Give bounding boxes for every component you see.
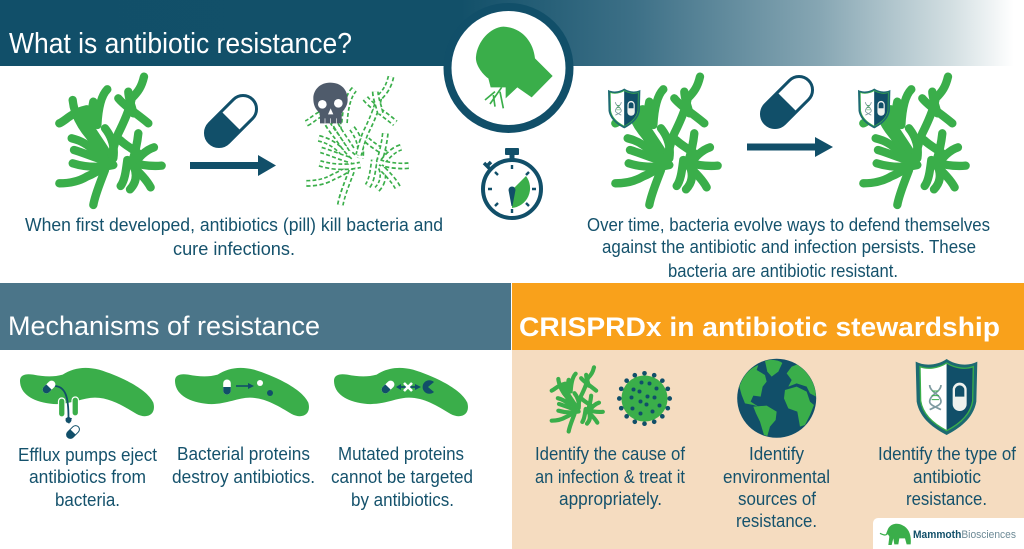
text: identify environmental: Identify [749, 444, 804, 464]
icon: pill left [200, 90, 262, 152]
heading: CRISPRDx: CRISPRDx in antibiotic stewardship [519, 312, 1000, 342]
text: identify environmental [723, 444, 830, 531]
logo: Mammoth Biosciences: MammothBiosciences [913, 529, 1016, 541]
text: proteins destroy: destroy antibiotics. [172, 467, 315, 487]
text: identify cause [535, 444, 686, 509]
header band: what is antibiotic resistance [0, 0, 1024, 66]
text: proteins destroy: Bacterial proteins [177, 444, 310, 464]
text: first developed: cure infections. [173, 239, 295, 259]
panel header: mechanisms [0, 283, 511, 350]
icon: shield large [916, 359, 977, 435]
panel: CRISPRDx body [512, 350, 1024, 549]
icon: pill right [756, 71, 818, 133]
text: first developed: When first developed, antibiotics (pill) kill bacteria and [25, 215, 443, 235]
arrow left [190, 155, 276, 176]
icon: killed bacteria [306, 77, 409, 205]
text: identify cause: Identify the cause of [535, 444, 686, 464]
panel header: CRISPRDx [512, 283, 1024, 350]
text: efflux: antibiotics from [29, 467, 146, 487]
text: identify environmental: environmental [723, 467, 830, 487]
icon: protein destroying bacterium [175, 368, 309, 416]
icon: efflux bacterium [20, 368, 154, 440]
icon: stopwatch [483, 148, 541, 218]
title: What is antibiotic resistance? [9, 28, 352, 60]
text: mutated: by antibiotics. [351, 490, 454, 510]
icon: skull [313, 83, 348, 123]
text: efflux: bacteria. [55, 490, 120, 510]
icon: bacteria cluster left [59, 77, 162, 205]
text: identify cause: appropriately. [559, 489, 662, 509]
text: mutated [331, 444, 473, 510]
icon: bacteria cluster with shield B [858, 77, 966, 205]
text: proteins destroy [172, 444, 315, 487]
text: identify cause: an infection & treat it [535, 467, 685, 487]
text: over time: against the antibiotic and infection persists. These [602, 237, 976, 257]
icon: small bacteria [552, 367, 603, 431]
text: identify type: Identify the type of [878, 444, 1017, 464]
icon: circled head coughing [448, 7, 570, 129]
text: identify type: antibiotic [913, 467, 981, 487]
arrow right [747, 137, 833, 157]
text: mutated: cannot be targeted [331, 467, 473, 487]
text: over time: Over time, bacteria evolve ways to defend themselves [587, 215, 990, 235]
text: first developed [25, 215, 443, 259]
text: efflux [18, 445, 157, 510]
icon: globe [737, 359, 816, 438]
icon: virus [617, 371, 672, 426]
text: mutated: Mutated proteins [338, 444, 464, 464]
text: identify type: resistance. [906, 489, 987, 509]
text: over time: bacteria are antibiotic resistant. [668, 261, 898, 281]
text: identify type [878, 444, 1017, 509]
icon: mutated protein bacterium [334, 368, 468, 416]
logo: Mammoth Biosciences [873, 518, 1024, 549]
text: identify environmental: sources of [738, 489, 817, 509]
text: efflux: Efflux pumps eject [18, 445, 157, 465]
icon: bacteria cluster with shield A [608, 77, 718, 205]
heading: mechanisms: Mechanisms of resistance [8, 311, 320, 341]
text: identify environmental: resistance. [736, 511, 817, 531]
text: over time [587, 215, 990, 281]
